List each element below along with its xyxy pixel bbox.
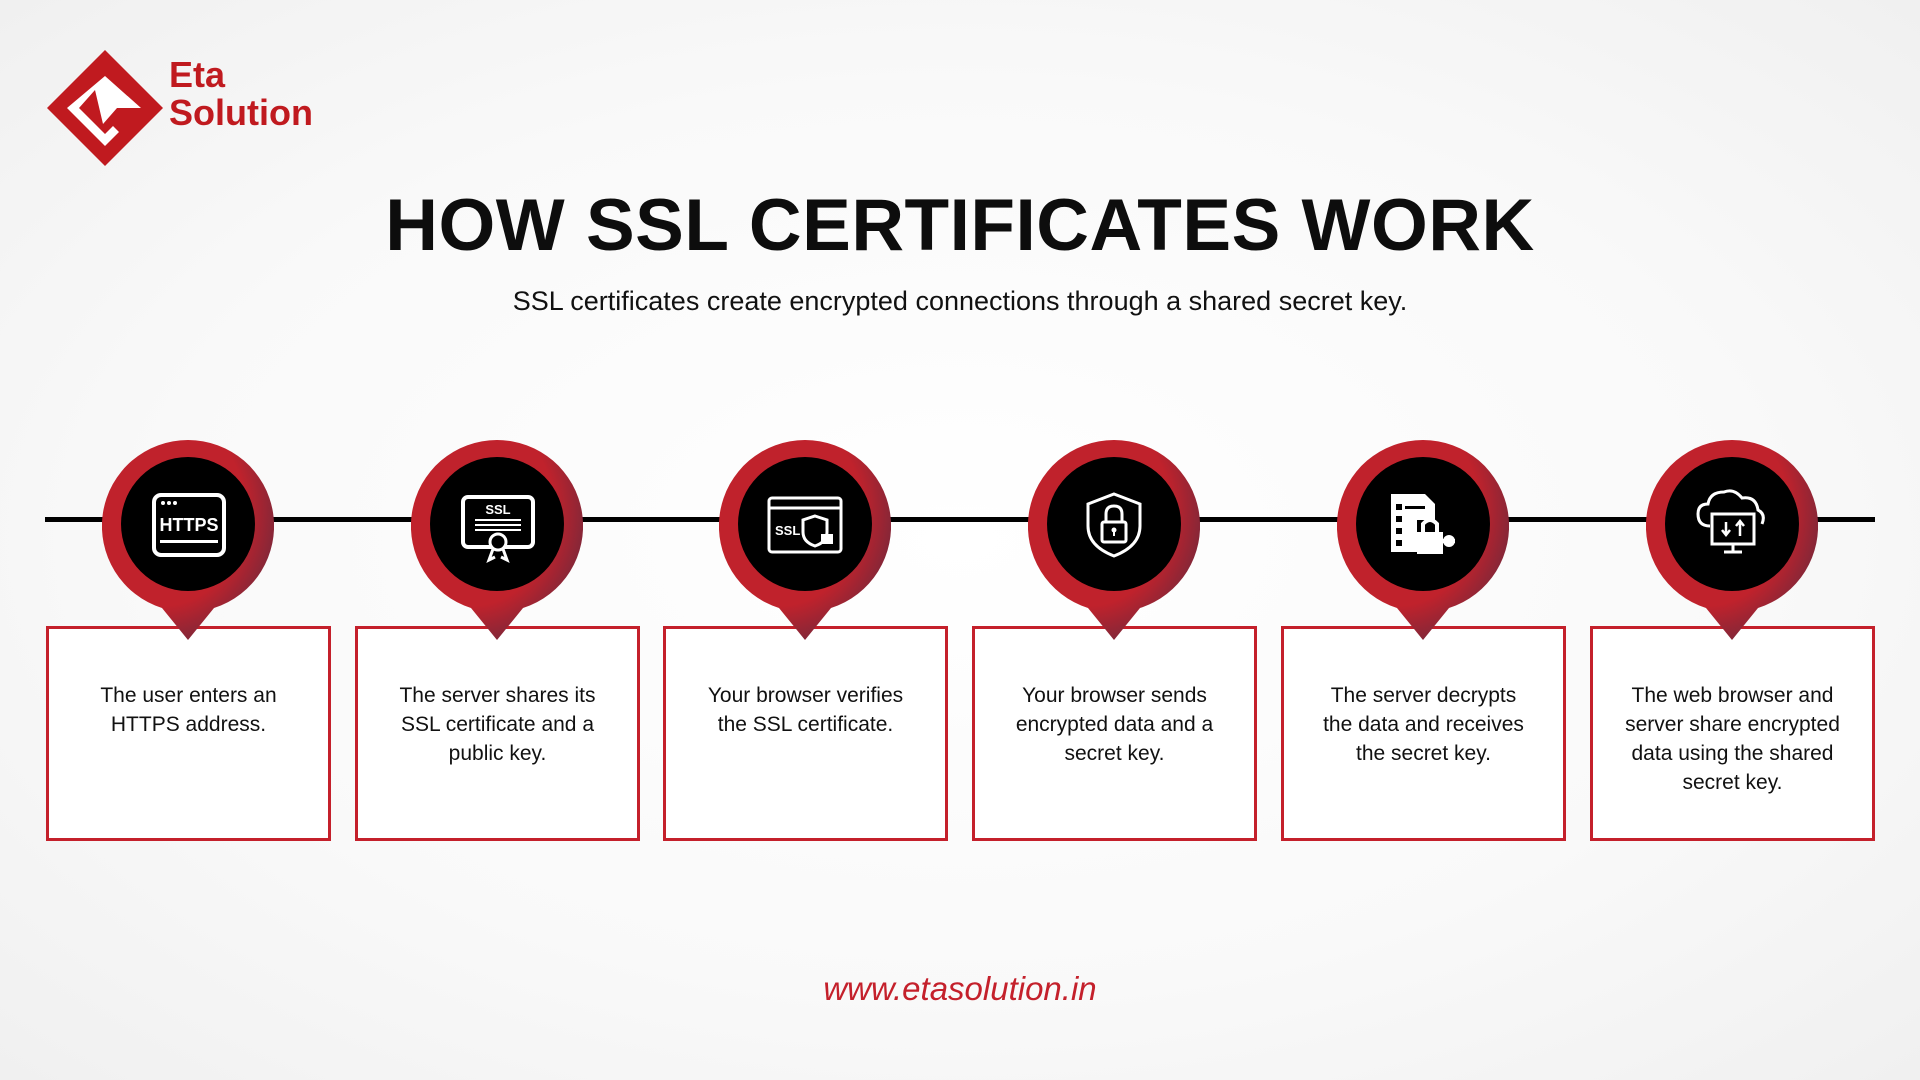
step 4 [972, 440, 1257, 841]
text box 5 [1281, 626, 1566, 841]
text box 6: The web browser and [1632, 684, 1833, 707]
text box 1 [46, 626, 331, 841]
subtitle: SSL certificates create encrypted connections through a shared secret key. [513, 286, 1407, 316]
logo: Eta [169, 54, 225, 95]
icon: ssl certificate: SSL [485, 502, 511, 517]
title: HOW SSL CERTIFICATES WORK [385, 185, 1535, 266]
text box 6: secret key. [1682, 771, 1782, 794]
step 5 [1281, 440, 1566, 841]
text box 1: HTTPS address. [111, 713, 266, 736]
text box 5: the secret key. [1356, 742, 1491, 765]
text box 4 [972, 626, 1257, 841]
step 3 [663, 440, 948, 841]
text box 4: encrypted data and a [1016, 713, 1213, 736]
icon: document key [1337, 440, 1509, 640]
text box 6: data using the shared [1632, 742, 1833, 765]
step 2 [355, 440, 640, 841]
icon: browser shield [719, 440, 891, 640]
logo [47, 50, 313, 166]
step 6 [1590, 440, 1875, 841]
text box 4: secret key. [1064, 742, 1164, 765]
icon: https [102, 440, 274, 640]
text box 1: The user enters an [100, 684, 277, 707]
text box 2: SSL certificate and a [401, 713, 594, 736]
text box 5: the data and receives [1323, 713, 1524, 736]
step 1 [46, 440, 331, 841]
text box 2 [355, 626, 640, 841]
text box 3: the SSL certificate. [718, 713, 893, 736]
text box 3 [663, 626, 948, 841]
text box 6 [1590, 626, 1875, 841]
icon: cloud monitor [1646, 440, 1818, 640]
icon: ssl certificate [411, 440, 583, 640]
icon: https: HTTPS [159, 515, 219, 535]
text box 6: server share encrypted [1625, 713, 1840, 736]
text box 2: The server shares its [399, 684, 596, 707]
text box 2: public key. [449, 742, 546, 765]
text box 4: Your browser sends [1022, 684, 1207, 707]
website url: www.etasolution.in [823, 970, 1097, 1007]
icon: shield lock [1028, 440, 1200, 640]
text box 5: The server decrypts [1331, 684, 1516, 707]
logo: Solution [169, 92, 313, 133]
icon: browser shield: SSL [775, 523, 800, 538]
text box 3: Your browser verifies [708, 684, 903, 707]
